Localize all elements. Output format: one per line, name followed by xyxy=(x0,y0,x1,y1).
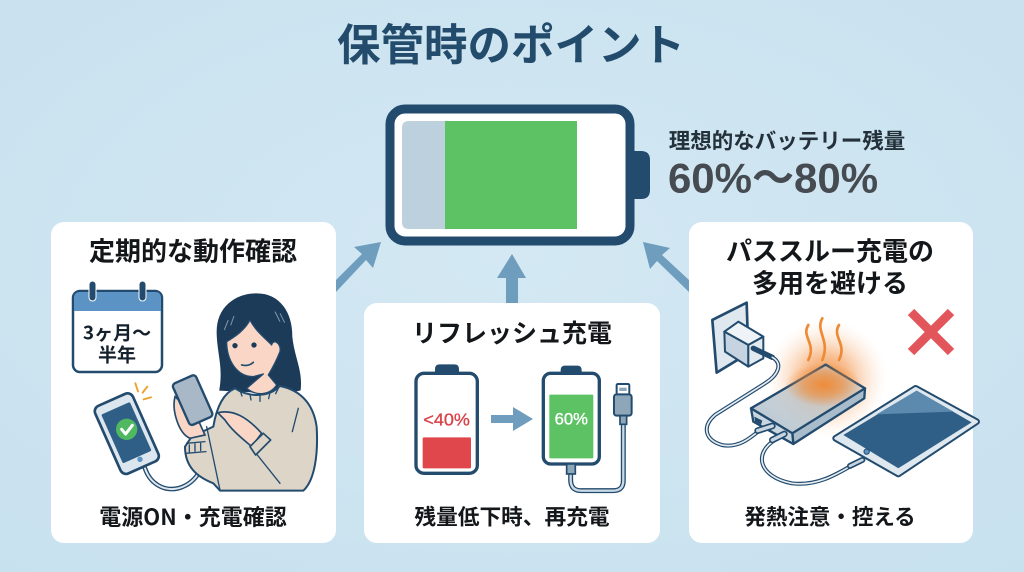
panel heading xyxy=(726,232,934,300)
icon: calendar: 3ヶ月〜 xyxy=(83,318,151,346)
panel: pass-through charging xyxy=(689,222,977,543)
icon: phone with check and cable xyxy=(93,383,206,489)
ideal battery label xyxy=(668,124,905,202)
panel heading: リフレッシュ充電 xyxy=(412,314,612,350)
panel caption: 発熱注意・控える xyxy=(744,500,916,532)
panel heading: 多用を避ける xyxy=(752,264,908,300)
icon: charged battery with cable: 60% xyxy=(555,409,588,428)
icon: red cross xyxy=(911,312,951,352)
arrow: left panel to battery xyxy=(336,242,381,292)
icon: low battery xyxy=(416,364,477,473)
panel caption: 残量低下時、再充電 xyxy=(414,500,610,532)
arrow: middle panel to battery xyxy=(497,254,526,303)
panel heading: 定期的な動作確認 xyxy=(89,232,297,268)
panel: refresh charge xyxy=(364,303,660,543)
panel heading: パススルー充電の xyxy=(726,232,934,268)
icon: charged battery with cable xyxy=(543,366,632,491)
illustration: overheating power bank setup xyxy=(707,303,977,484)
title: 保管時のポイント xyxy=(337,10,685,74)
panel: periodic check xyxy=(51,222,336,543)
icon: low battery: <40% xyxy=(423,409,470,429)
icon: calendar xyxy=(73,281,162,372)
main battery icon xyxy=(390,109,650,241)
illustration: woman holding power bank xyxy=(172,294,317,491)
arrow: low to charged xyxy=(491,407,533,431)
icon: calendar: 半年 xyxy=(98,340,136,368)
arrow: right panel to battery xyxy=(643,242,689,292)
ideal battery label: 60%〜80% xyxy=(668,154,878,202)
ideal battery label: 理想的なバッテリー残量 xyxy=(669,124,905,156)
panel caption: 電源ON・充電確認 xyxy=(99,500,287,532)
